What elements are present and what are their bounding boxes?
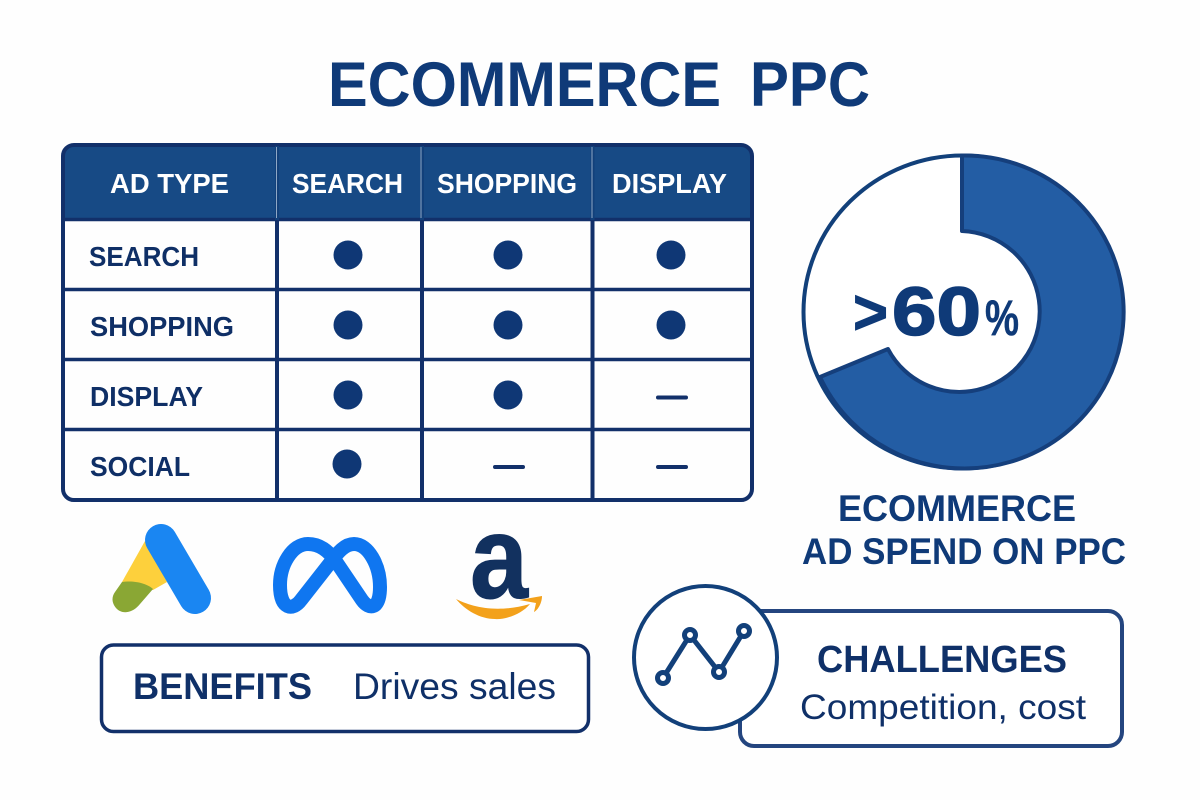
- benefits text: Drives sales: [353, 666, 556, 707]
- icon: Meta logo: [280, 544, 380, 607]
- amazon smile arrow: [456, 596, 542, 619]
- icon: Google Ads logo: [112, 540, 195, 612]
- donut chart: [804, 155, 1124, 468]
- row labels: [89, 241, 234, 482]
- donut caption: [802, 488, 1126, 572]
- panel: benefits: [102, 645, 588, 732]
- donut caption: AD SPEND ON PPC: [802, 531, 1126, 572]
- donut value: %: [985, 290, 1019, 346]
- panel: challenges: [740, 611, 1122, 746]
- table header band: [63, 145, 752, 220]
- icon: Amazon logo: a: [470, 492, 529, 624]
- header labels: [110, 168, 727, 199]
- challenges text: Competition, cost: [800, 688, 1086, 727]
- unavailable dashes: [495, 398, 686, 467]
- benefits heading: BENEFITS: [133, 666, 312, 707]
- header labels: AD TYPE: [110, 168, 229, 199]
- header labels: SHOPPING: [437, 168, 577, 199]
- icon: line chart in circle: [634, 586, 777, 729]
- availability dots: [332, 240, 686, 478]
- donut value: 60: [892, 273, 981, 350]
- donut caption: ECOMMERCE: [838, 488, 1076, 529]
- row labels: SOCIAL: [90, 451, 190, 482]
- row labels: SEARCH: [89, 241, 199, 272]
- donut value: >: [853, 276, 888, 348]
- header labels: SEARCH: [292, 168, 403, 199]
- panel: ad type comparison table: [63, 145, 752, 500]
- challenges heading: CHALLENGES: [817, 639, 1067, 681]
- row labels: SHOPPING: [90, 311, 234, 342]
- donut value: [853, 273, 1019, 350]
- title: ECOMMERCE: [328, 50, 721, 120]
- title: PPC: [750, 50, 870, 120]
- header labels: DISPLAY: [612, 168, 727, 199]
- row labels: DISPLAY: [90, 381, 203, 412]
